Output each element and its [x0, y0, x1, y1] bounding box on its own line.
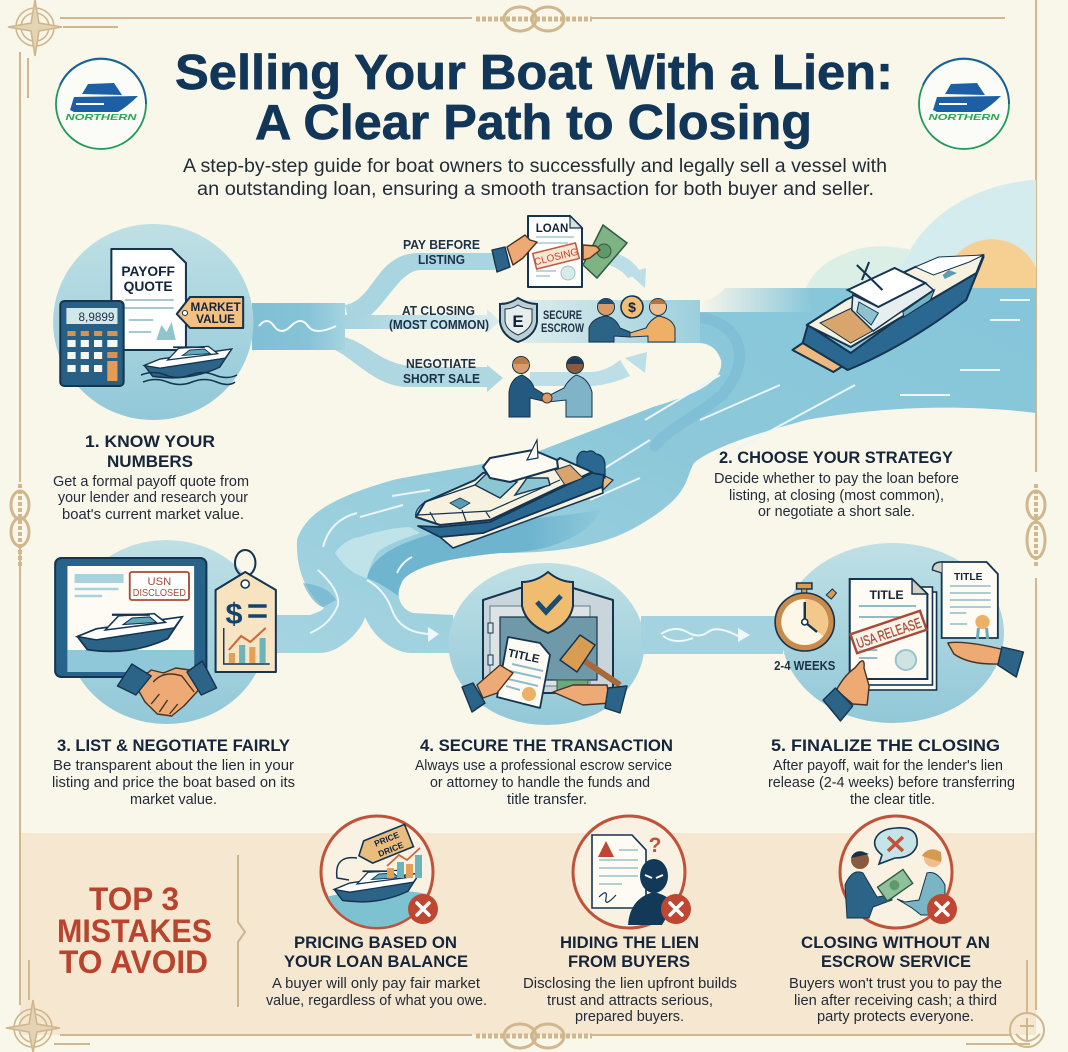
icon: title document: [497, 637, 550, 708]
step 3 text: Be transparent about the lien in your: [53, 758, 294, 774]
mistake 3 text: CLOSING WITHOUT AN: [801, 934, 990, 952]
mistake 3 text: ESCROW SERVICE: [821, 953, 971, 971]
step 5 text: the clear title.: [850, 792, 935, 808]
mistake 1 text: value, regardless of what you owe.: [266, 993, 487, 1009]
icon: market value tag: MARKET: [190, 301, 241, 314]
strategy labels: LISTING: [418, 253, 465, 267]
icon: boat on water: [141, 346, 237, 384]
mistakes divider: [238, 855, 245, 1007]
icon: E escrow shield: E: [512, 312, 524, 331]
strategy labels: SHORT SALE: [403, 372, 480, 386]
icon: clear title document: [932, 562, 998, 639]
logo: left: NORTHERN: [66, 112, 138, 122]
icon: payoff quote document: QUOTE: [124, 279, 173, 294]
strategy labels: NEGOTIATE: [406, 357, 476, 371]
icon: payoff quote document: [111, 249, 186, 350]
subtitle: an outstanding loan, ensuring a smooth transaction for both buyer and seller.: [197, 179, 874, 200]
icon: left hand: [823, 661, 869, 721]
icon: right hand: [948, 642, 1023, 677]
mistake 2 text: trust and attracts serious,: [547, 993, 713, 1009]
icon: two people with dollar coin: [589, 296, 675, 342]
icon: released title document: USA RELEASE: [855, 616, 924, 652]
panel: step 4 illustration: [448, 563, 644, 725]
step 1 text: boat's current market value.: [62, 507, 244, 523]
mistakes band background: [20, 833, 1036, 1035]
icon: loan document with hand and money: CLOSING: [533, 247, 580, 268]
title: [175, 46, 893, 150]
icon: mistake 1 pricing: [321, 816, 438, 930]
icon: left hand: [462, 665, 513, 712]
mistake 2 text: Disclosing the lien upfront builds: [523, 976, 737, 992]
icon: mistake 1 pricing: PRICE: [373, 829, 401, 849]
strategy labels: [389, 238, 489, 386]
strategy labels: AT CLOSING: [402, 304, 475, 318]
panel: step 5 illustration: [774, 543, 1023, 723]
panel: step 3 illustration: [55, 540, 276, 724]
heading: top 3 mistakes to avoid: TOP 3: [89, 881, 179, 917]
rope knot: left: [11, 484, 29, 566]
strategy labels: (MOST COMMON): [389, 318, 489, 332]
logo: right: [919, 59, 1009, 149]
step 5 text: After payoff, wait for the lender's lien: [773, 758, 1003, 774]
step 3 text: 3. LIST & NEGOTIATE FAIRLY: [57, 736, 291, 755]
mistake 1 text: A buyer will only pay fair market: [272, 976, 480, 992]
icon: gavel: [560, 635, 620, 685]
step 3 text: [52, 736, 295, 808]
step 4 text: title transfer.: [507, 792, 587, 808]
step 2 text: 2. CHOOSE YOUR STRATEGY: [719, 448, 954, 467]
anchor ornament: bottom right: [1010, 1013, 1044, 1047]
mistake 3 text: [789, 934, 1002, 1025]
icon: boat on river: [416, 440, 613, 548]
panel: step 1 illustration: [53, 224, 253, 420]
compass: top left: [8, 0, 62, 56]
step 4 text: or attorney to handle the funds and: [430, 775, 650, 791]
title: A Clear Path to Closing: [255, 96, 812, 150]
step 2 text: listing, at closing (most common),: [729, 488, 944, 504]
step 1 text: your lender and research your: [58, 490, 248, 506]
panel: escrow strip background: [523, 300, 700, 343]
heading: top 3 mistakes to avoid: MISTAKES: [57, 913, 212, 949]
rope knot: right: [1027, 484, 1045, 566]
icon: two people with dollar coin: $: [628, 299, 636, 315]
icon: mistake 3 no escrow: [840, 816, 957, 928]
icon: calculator: [60, 301, 124, 386]
icon: calculator: 8,9899: [79, 311, 114, 324]
icon: handshake people for short sale: [509, 356, 592, 417]
secure escrow label: SECURE: [543, 310, 582, 322]
mistake 1 text: YOUR LOAN BALANCE: [284, 953, 468, 971]
step 1 text: Get a formal payoff quote from: [53, 474, 249, 490]
heading: top 3 mistakes to avoid: TO AVOID: [59, 944, 208, 980]
icon: loan document with hand and money: LOAN: [536, 223, 568, 235]
icon: tablet listing: USN: [148, 576, 171, 588]
step 1 text: [53, 432, 249, 523]
river band to step 5: [641, 616, 783, 654]
step 4 text: [415, 736, 673, 808]
icon: right hand: [553, 685, 627, 713]
step 2 text: Decide whether to pay the loan before: [714, 471, 959, 487]
icon: stopwatch: [775, 583, 836, 651]
step 1 text: NUMBERS: [107, 452, 193, 471]
logo: left: [56, 59, 146, 149]
step 5 text: 5. FINALIZE THE CLOSING: [771, 736, 1000, 755]
mistake 3 text: Buyers won't trust you to pay the: [789, 976, 1002, 992]
icon: tablet listing: [55, 558, 206, 677]
mistake 3 text: party protects everyone.: [817, 1009, 974, 1025]
rope knot: top centre: [476, 7, 592, 31]
secure escrow label: [541, 310, 584, 335]
river depth shading and wake: [303, 300, 1030, 642]
icon: mistake 2 hiding: [573, 816, 691, 928]
sea fade toward the strategies: [672, 285, 812, 312]
mistake 2 text: [523, 934, 737, 1025]
step 4 text: Always use a professional escrow service: [415, 758, 672, 774]
icon: released title document: [850, 579, 937, 690]
icon: vault: [483, 588, 613, 693]
mistake 2 text: FROM BUYERS: [568, 953, 690, 971]
icon: tablet listing: DISCLOSED: [133, 587, 186, 599]
strategy connector arrows: [530, 252, 647, 386]
icon: mistake 2 hiding: ?: [649, 834, 661, 857]
icon: price tag: [216, 550, 276, 672]
winding river path: [277, 288, 1036, 653]
mistake 3 text: lien after receiving cash; a third: [794, 993, 997, 1009]
icon: released title document: TITLE: [869, 588, 904, 602]
mistake 1 text: PRICING BASED ON: [294, 934, 457, 952]
step 5 text: release (2-4 weeks) before transferring: [768, 775, 1015, 791]
2-4 weeks label: 2-4 WEEKS: [774, 658, 836, 673]
step 1 text: 1. KNOW YOUR: [85, 432, 215, 451]
step 4 text: 4. SECURE THE TRANSACTION: [420, 736, 673, 755]
rope knot: bottom centre: [476, 1024, 592, 1048]
mistake 1 text: [266, 934, 487, 1009]
step 2 text: or negotiate a short sale.: [758, 504, 915, 520]
step 2 text: [714, 448, 959, 520]
title: Selling Your Boat With a Lien:: [175, 46, 893, 100]
heading: top 3 mistakes to avoid: [57, 881, 212, 980]
secure escrow label: ESCROW: [541, 323, 584, 335]
subtitle: A step-by-step guide for boat owners to successfully and legally sell a vessel with: [183, 156, 887, 177]
compass: bottom left: [6, 1000, 60, 1052]
mistake 2 text: prepared buyers.: [575, 1009, 684, 1025]
step 3 text: market value.: [130, 792, 217, 808]
icon: title document: TITLE: [507, 648, 541, 666]
icon: boat at sea: [792, 255, 984, 372]
icon: market value tag: VALUE: [196, 313, 235, 326]
icon: loan document with hand and money: [492, 216, 627, 287]
step 3 text: listing and price the boat based on its: [52, 775, 295, 791]
strategy labels: PAY BEFORE: [403, 238, 480, 252]
icon: clear title document: TITLE: [954, 572, 983, 583]
icon: price tag: $: [225, 598, 243, 631]
sky, sun and sea: [806, 180, 1036, 288]
mistake 2 text: HIDING THE LIEN: [560, 934, 699, 952]
icon: E escrow shield: [500, 298, 537, 342]
icon: market value tag: [177, 297, 243, 328]
icon: handshake: [117, 661, 217, 716]
icon: mistake 1 pricing: DRICE: [377, 840, 405, 859]
river branches from step 1 to the three strategies: [252, 253, 503, 392]
subtitle: [183, 156, 887, 200]
step 5 text: [768, 736, 1015, 808]
icon: payoff quote document: PAYOFF: [121, 264, 175, 279]
logo: right: NORTHERN: [928, 112, 1001, 122]
icon: gold shield with check: [522, 572, 573, 633]
